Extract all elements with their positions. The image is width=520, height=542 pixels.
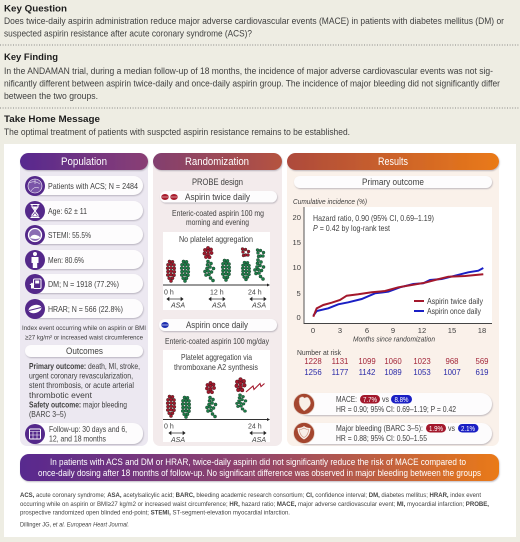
abbreviations footnote: ACS, acute coronary syndrome; ASA, acetylsalicylic acid; BARC, bleeding academic research consortium; CI, confidence interval; DM, diabetes mellitus; HRAR, index event [20,492,481,499]
design label: PROBE design [192,177,243,187]
result: major bleeding: 2.1% [461,424,475,433]
x axis labels [311,326,486,335]
result: MACE: MACE: [336,394,357,404]
diagram: platelet aggregation: 0 h [164,424,174,430]
outcomes text: Safety outcome: major bleeding [29,400,127,410]
stat: age: Age: 62 ± 11 [48,206,87,216]
panel: results [287,153,499,446]
diagram: no platelet aggregation: ASA [211,302,226,310]
number at risk table: Number at risk [297,348,341,357]
legend: Aspirin twice daily [427,296,484,306]
hazard ratio annotation [313,213,434,233]
diagram: platelet aggregation: ASA [251,437,266,444]
stat: STEMI [25,225,143,245]
outcomes text: stent thrombosis, or acute arterial [29,380,134,390]
outcomes text: (BARC 3–5) [29,409,66,419]
key finding [4,52,500,101]
result: major bleeding: HR = 0.88; 95% CI: 0.50–1.55 [336,433,427,443]
twice daily regimen: Enteric-coated aspirin 100 mg [172,208,264,218]
result: MACE: vs [382,394,389,404]
population header [20,153,148,170]
twice daily regimen: morning and evening [186,217,249,227]
y axis labels: 20 [292,213,301,222]
y axis labels [292,213,301,322]
outcomes text [29,361,140,419]
diagram: no platelet aggregation: No platelet aggregation [179,234,253,244]
hazard ratio annotation: Hazard ratio, 0.90 (95% CI, 0.69–1.19) [313,213,434,223]
white figure area [4,144,516,537]
stat: HRAR: HRAR; N = 566 (22.8%) [48,304,123,314]
result: MACE: 7.7% [363,395,377,404]
outcomes heading [25,345,143,357]
outcomes heading: Outcomes [66,346,104,356]
diagram: platelet aggregation [163,350,270,444]
key finding: between the two groups. [4,91,98,101]
primary outcome heading: Primary outcome [362,177,424,187]
hazard ratio annotation: P = 0.42 by log-rank test [313,223,391,233]
key finding: Key Finding [4,52,58,63]
randomization header [153,153,282,170]
arm: aspirin once daily: Aspirin once daily [186,320,249,330]
number at risk table [297,348,489,377]
once daily regimen: Enteric-coated aspirin 100 mg/day [165,336,270,346]
take home message: Take Home Message [4,114,100,125]
result: major bleeding: Major bleeding (BARC 3–5): [336,423,423,433]
result: MACE: HR = 0.90; 95% CI: 0.69–1.19; P = 0.42 [336,404,456,414]
stat: age [25,201,143,221]
key finding: In the ANDAMAN trial, during a median follow-up of 18 months, the incidence of major adverse cardiovascular events was not sig- [4,66,493,76]
diagram: no platelet aggregation: 0 h [164,290,174,296]
x axis labels: 9 [391,326,395,335]
number at risk table: 1177 [332,368,348,377]
primary outcome heading [294,176,492,188]
x axis labels: 3 [338,326,342,335]
number at risk table: 1142 [359,368,375,377]
legend: Aspirin once daily [427,306,482,316]
y axis labels: 0 [296,313,301,322]
curve: aspirin once daily [313,268,483,316]
number at risk table: 1060 [384,357,402,366]
y axis labels: 5 [296,289,301,298]
stat: DM: DM; N = 1918 (77.2%) [48,279,119,289]
stat: DM [25,274,143,294]
x axis labels: 18 [478,326,486,335]
chart: cumulative incidence [292,197,492,344]
outcomes text: Primary outcome: death, MI, stroke, [29,361,140,371]
number at risk table: 569 [475,357,489,366]
outcomes text: urgent coronary revascularization, [29,370,133,380]
results header [287,153,499,170]
arm: aspirin twice daily: Aspirin twice daily [185,192,251,202]
result: major bleeding [294,422,492,444]
number at risk table: 1256 [304,368,322,377]
diagram: no platelet aggregation: ASA [170,302,185,310]
number at risk table: 968 [445,357,459,366]
stat: STEMI: STEMI: 55.5% [48,230,91,240]
number at risk table: 1007 [443,368,461,377]
number at risk table: 1131 [332,357,348,366]
diagram: platelet aggregation: thromboxane A2 synthesis [174,362,258,372]
x axis labels: 0 [311,326,315,335]
HRAR definition [22,325,146,342]
number at risk table: 619 [475,368,489,377]
key finding: nificantly different between aspirin twice-daily and once-daily aspirin group. The incidence of major bleeding did not significantly differ [4,78,500,88]
result: major bleeding: vs [448,423,455,433]
panel: population [20,153,148,446]
conclusion banner: In patients with ACS and DM or HRAR, twice-daily aspirin did not significantly reduce the risk of MACE compared to [50,457,466,467]
arm: aspirin twice daily [160,191,277,202]
diagram: no platelet aggregation: 24 h [248,290,262,296]
stat: men [25,250,143,270]
diagram: platelet aggregation: ASA [170,437,185,444]
results header: Results [378,156,408,168]
chart: cumulative incidence: Cumulative incidence (%) [293,197,367,206]
follow-up: Follow-up: 30 days and 6, [49,424,127,434]
stat: patients [25,176,143,196]
twice daily regimen [172,208,264,227]
HRAR definition: ≥27 kg/m² or increased waist circumference [25,334,143,342]
x axis labels: 15 [448,326,456,335]
key question [4,4,504,38]
diagram: no platelet aggregation: ASA [251,302,266,310]
diagram: platelet aggregation: Platelet aggregation via [181,352,252,362]
diagram: no platelet aggregation [163,232,270,310]
arm: aspirin once daily [159,319,277,331]
follow-up: 12, and 18 months [49,434,106,444]
citation: Dillinger JG, et al. European Heart Journal. [20,522,129,528]
stat: patients: Patients with ACS; N = 2484 [48,181,138,191]
number at risk table: 1089 [384,368,402,377]
number at risk table: 1053 [413,368,431,377]
number at risk table: 1228 [304,357,322,366]
abbreviations footnote [20,492,489,516]
panel: randomization [153,153,282,446]
y axis labels: 15 [292,238,301,247]
number at risk table: 1099 [358,357,376,366]
population header: Population [61,156,107,168]
legend [414,296,484,316]
key question: Key Question [4,4,67,14]
chart: cumulative incidence: Months since randomization [353,334,435,344]
stat: men: Men: 80.6% [48,255,84,265]
result: major bleeding: 1.9% [429,424,443,433]
stat: HRAR [25,299,143,319]
result: MACE [294,393,492,415]
follow-up [25,423,143,444]
key question: suspected aspirin resistance after acute coronary syndrome (ACS)? [4,28,252,38]
HRAR definition: Index event occurring while on aspirin or BMI [22,325,146,332]
abbreviations footnote: prospective randomized open blinded end-point; STEMI, ST-segment-elevation myocardial infarction. [20,510,290,516]
result: MACE: 8.8% [394,395,409,404]
conclusion banner [20,454,499,481]
outcomes text: thrombotic event [29,391,93,400]
x axis labels: 6 [365,326,369,335]
abbreviations footnote: occurring while on aspirin or BMI≥27 kg/m2 or increased waist circumference; HR, hazard ratio; MACE, major adverse cardiovascular event; MI, myocardial infarction; PROBE, [20,501,489,508]
diagram: no platelet aggregation: 12 h [210,290,224,296]
x axis labels: 12 [418,326,426,335]
key question: Does twice-daily aspirin administration reduce major adverse cardiovascular events (MACE) in patients with diabetes mellitus (DM) or [4,16,504,26]
y axis labels: 10 [292,263,301,272]
diagram: platelet aggregation: 24 h [248,424,262,430]
take home message: The optimal treatment of patients with suspcted aspirin resistance remains to be established. [4,127,350,137]
number at risk table: 1023 [413,357,431,366]
take home message [4,114,350,137]
curve: aspirin twice daily [313,274,483,317]
randomization header: Randomization [185,156,249,168]
